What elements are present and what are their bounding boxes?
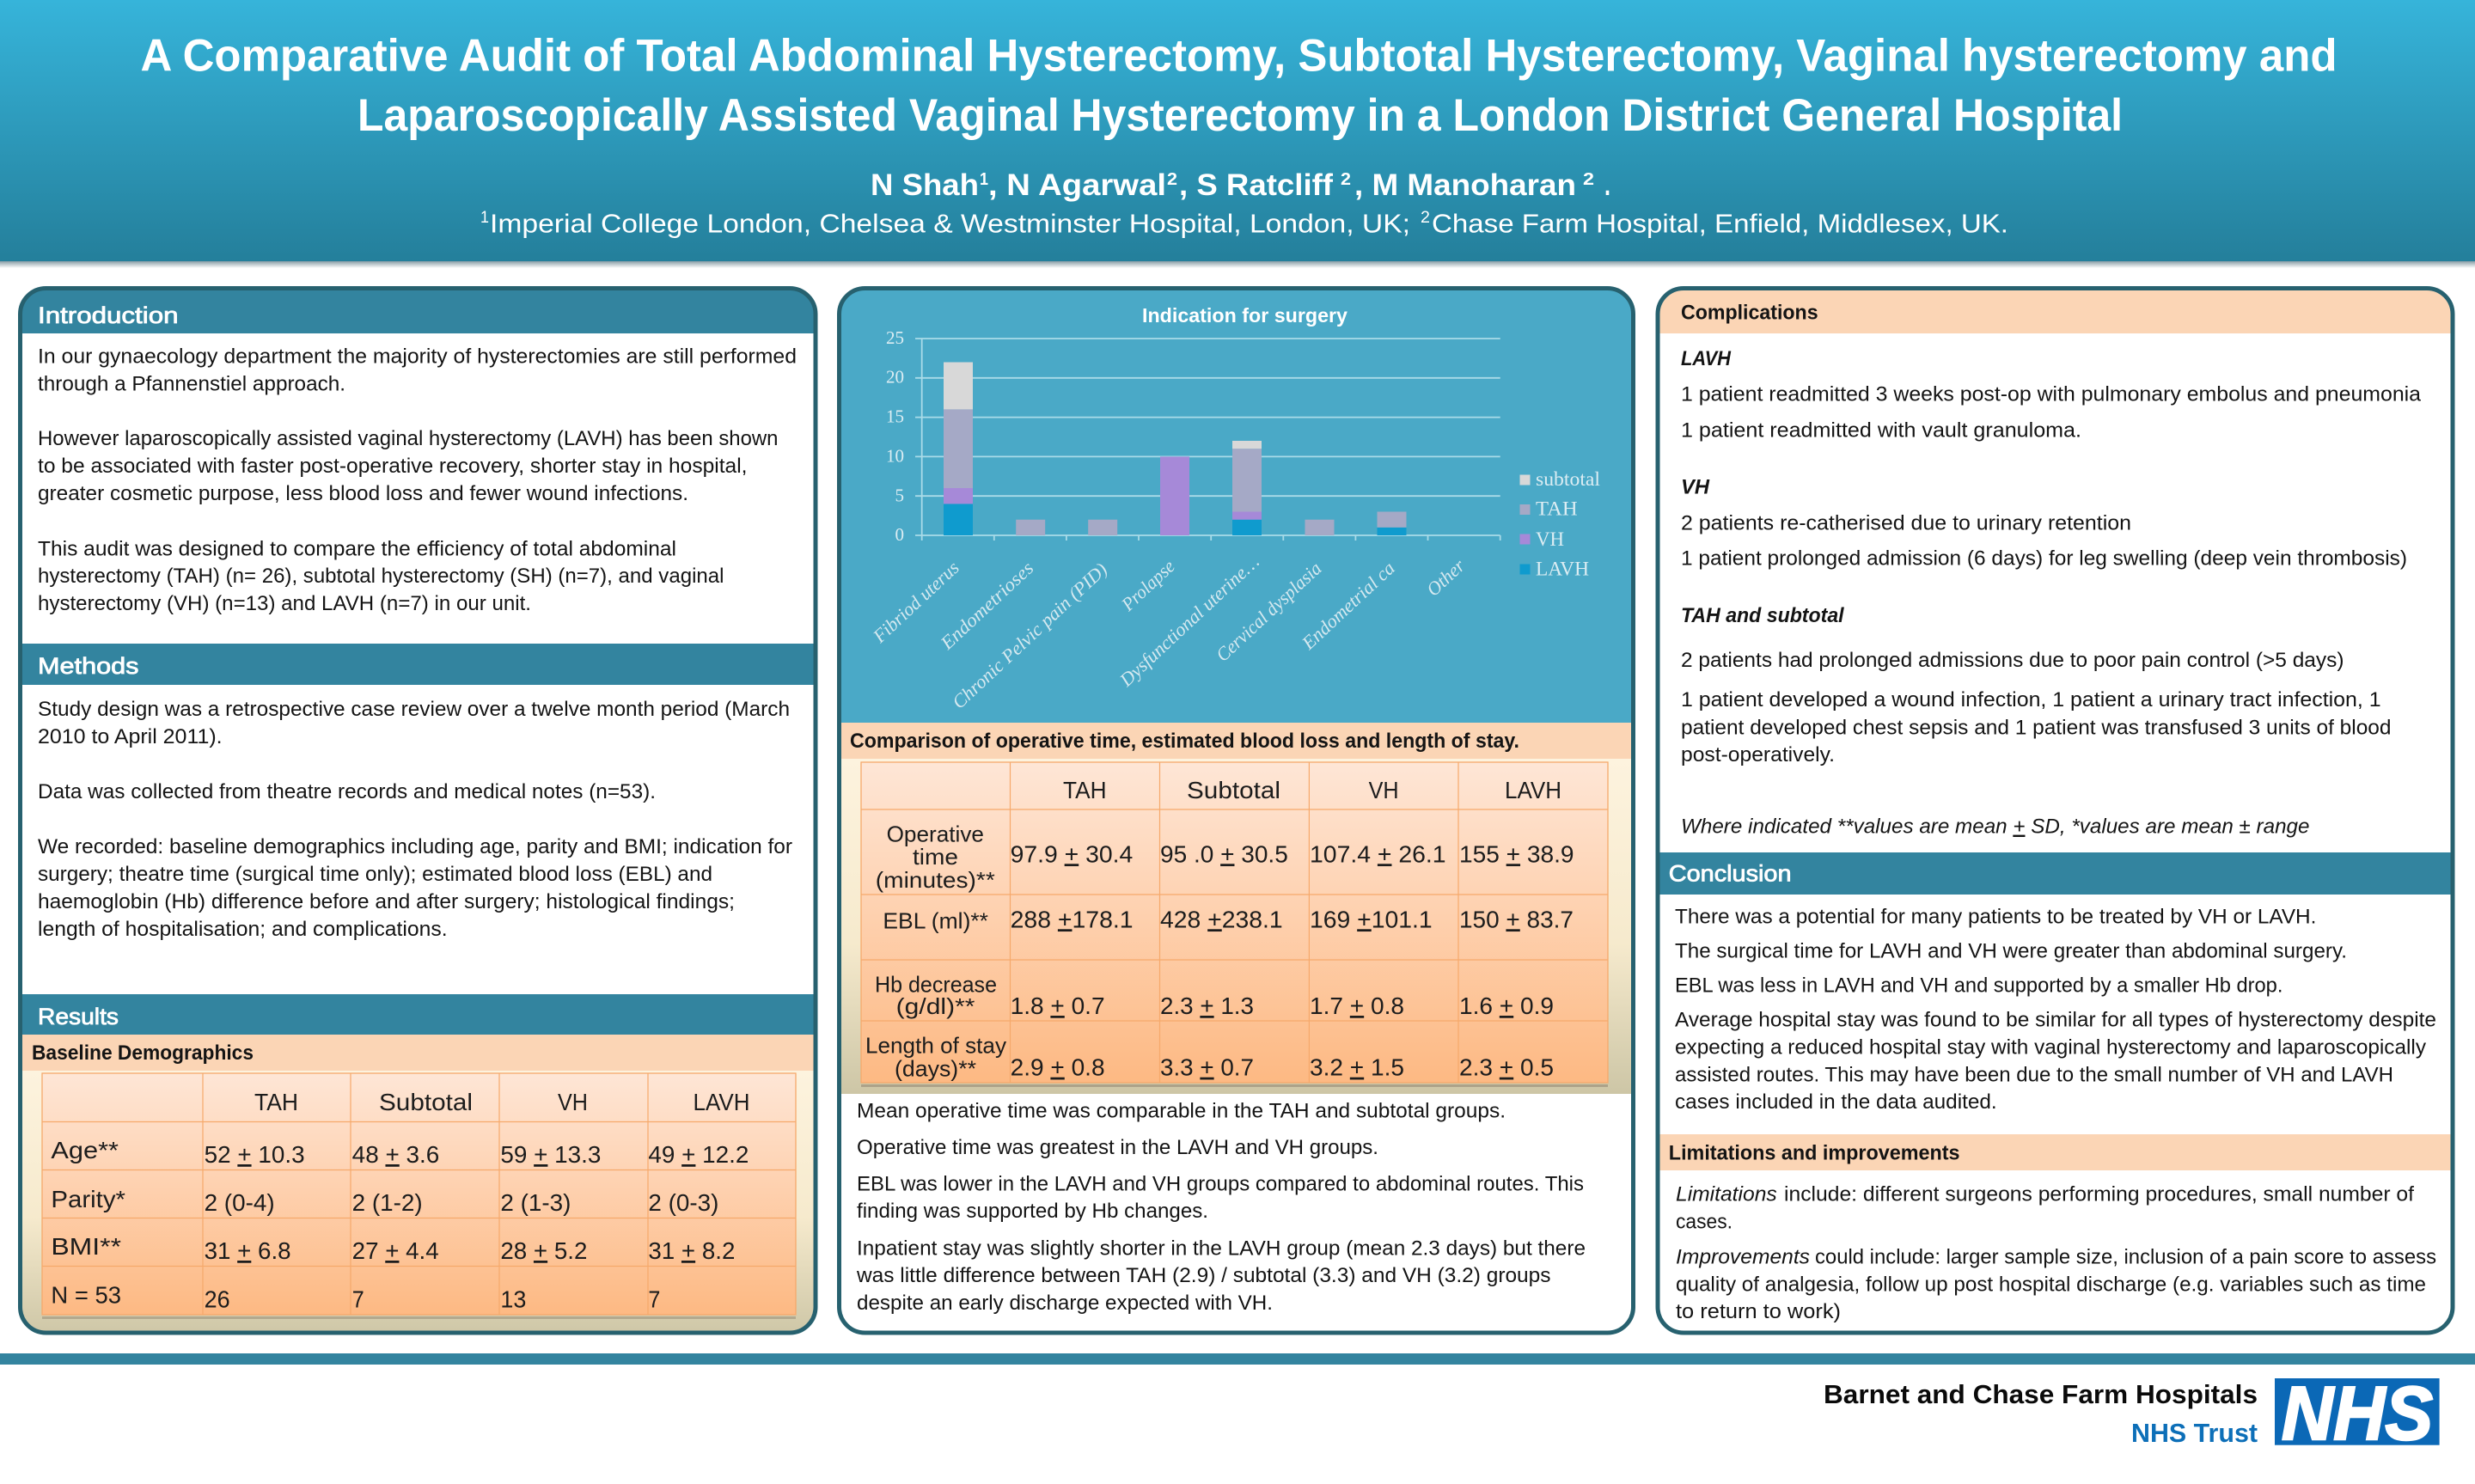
table row: N [51, 1282, 660, 1313]
table header row: LAVH [1505, 777, 1561, 803]
text: complications: 2 patients had prolonged admissions due to poor pain control (>5 days) [1681, 649, 2344, 672]
category labels: Endometrioses [936, 557, 1037, 654]
table row: parity: Parity* [51, 1186, 125, 1212]
legend: LAVH [1536, 559, 1589, 579]
text: complications: LAVH [1681, 347, 1732, 370]
text: methods: length of hospitalisation; and complications. [38, 918, 448, 941]
table row: BMI: BMI** [51, 1233, 121, 1260]
table row: length of stay: 2.9 + 0.8 [1011, 1054, 1105, 1081]
text: results commentary: finding was supported by Hb changes. [857, 1200, 1208, 1223]
text: conclusion: Average hospital stay was found to be similar for all types of hysterectomy despite [1675, 1008, 2436, 1031]
category labels: Endometrial ca [1297, 557, 1399, 654]
text: results commentary: Mean operative time was comparable in the TAH and subtotal groups. [857, 1100, 1506, 1123]
table header row: TAH [254, 1089, 298, 1115]
text: results commentary: despite an early discharge expected with VH. [857, 1292, 1273, 1315]
table row: N: 26 [205, 1286, 230, 1313]
table header row: VH [558, 1089, 588, 1115]
y axis labels: 10 [886, 446, 904, 467]
y axis labels: 0 [895, 524, 904, 545]
table row: operative time [876, 821, 1574, 893]
text: complications: 1 patient readmitted 3 weeks post-op with pulmonary embolus and pneumonia [1681, 382, 2422, 406]
text: limitations and improvements: could include: larger sample size, inclusion of a pain score to assess [1815, 1246, 2436, 1269]
text: introduction: greater cosmetic purpose, less blood loss and fewer wound infections. [38, 482, 688, 505]
table row: length of stay: Length of stay [865, 1033, 1006, 1059]
table row: EBL: 150 + 83.7 [1459, 906, 1574, 932]
category labels [868, 551, 1470, 713]
category labels: Other [1422, 554, 1470, 601]
text: methods: We recorded: baseline demographics including age, parity and BMI; indication for [38, 835, 792, 858]
text: introduction: However laparoscopically assisted vaginal hysterectomy (LAVH) has been shown [38, 427, 779, 450]
y axis labels [886, 327, 904, 545]
y axis labels: 20 [886, 367, 904, 388]
text: limitations and improvements: Improvements [1676, 1246, 1810, 1269]
table row: age: 48 + 3.6 [352, 1141, 439, 1168]
authors [871, 168, 1610, 202]
text: limitations and improvements: quality of analgesia, follow up post hospital discharge (e.g. variables such as time [1676, 1273, 2426, 1297]
table row: age [51, 1137, 749, 1168]
table row: operative time: 97.9 + 30.4 [1011, 840, 1133, 867]
table header row: TAH [1063, 777, 1107, 803]
table row: N: 7 [352, 1286, 364, 1313]
chart: indication for surgery [868, 304, 1600, 713]
table row: Hb decrease: 1.8 + 0.7 [1011, 992, 1105, 1019]
authors: , M Manoharan [1354, 168, 1576, 202]
text: results commentary [856, 1100, 1586, 1315]
text: complications: 1 patient readmitted with vault granuloma. [1681, 418, 2081, 442]
heading: results: Results [38, 1004, 119, 1029]
panel: middle column [834, 286, 1637, 1333]
text: introduction: through a Pfannenstiel approach. [38, 373, 345, 396]
text: conclusion: There was a potential for many patients to be treated by VH or LAVH. [1675, 905, 2316, 928]
text: introduction: hysterectomy (TAH) (n= 26), subtotal hysterectomy (SH) (n=7), and vaginal [38, 565, 724, 588]
text: conclusion [1675, 905, 2436, 1114]
text: conclusion: cases included in the data audited. [1675, 1090, 1997, 1114]
table header row: Subtotal [379, 1089, 473, 1115]
table row: length of stay: (days)** [895, 1056, 976, 1082]
text: introduction [38, 345, 797, 615]
text: methods: 2010 to April 2011). [38, 725, 223, 748]
category labels: Fibriod uterus [868, 557, 963, 647]
chart title: Indication for surgery [1142, 304, 1348, 327]
table row: Hb decrease: 1.6 + 0.9 [1459, 992, 1554, 1019]
footer: trust name: NHS Trust [2131, 1418, 2258, 1448]
table: operative comparison [861, 762, 1608, 1087]
text: complications: 1 patient prolonged admission (6 days) for leg swelling (deep vein thrombosis) [1681, 547, 2407, 571]
table row: Hb decrease: (g/dl)** [896, 993, 975, 1019]
table row: operative time: (minutes)** [876, 867, 995, 893]
authors: N Shah [871, 168, 979, 202]
authors: 2 [1583, 170, 1594, 189]
heading: methods: Methods [38, 653, 139, 679]
text: introduction: This audit was designed to compare the efficiency of total abdominal [38, 538, 676, 561]
table header row: VH [1369, 777, 1399, 803]
affiliations: Chase Farm Hospital, Enfield, Middlesex, UK. [1432, 209, 2008, 239]
table row: age: 52 + 10.3 [205, 1141, 305, 1168]
text: limitations and improvements [1676, 1182, 2436, 1323]
title: Laparoscopically Assisted Vaginal Hysterectomy in a London District General Hospital [358, 90, 2123, 141]
text: methods [38, 698, 792, 941]
table row: N: 13 [500, 1286, 526, 1313]
table row: age: 59 + 13.3 [500, 1141, 601, 1168]
text: methods: haemoglobin (Hb) difference before and after surgery; histological findings; [38, 890, 735, 913]
table row: age: 49 + 12.2 [648, 1141, 749, 1168]
table row: parity: 2 (0-3) [648, 1189, 718, 1216]
table row: BMI: 31 + 6.8 [205, 1237, 291, 1264]
title [141, 31, 2338, 141]
subheading: limitations and improvements: Limitations and improvements [1669, 1141, 1959, 1164]
text: introduction: In our gynaecology department the majority of hysterectomies are still performed [38, 345, 797, 369]
authors: , S Ratcliff [1179, 168, 1333, 202]
footer: trust name [1824, 1379, 2258, 1448]
text: methods: Study design was a retrospective case review over a twelve month period (March [38, 698, 790, 721]
subheading: baseline demographics: Baseline Demographics [32, 1041, 254, 1065]
table row: EBL [883, 906, 1574, 934]
y axis labels: 15 [886, 406, 904, 426]
table header row [1063, 777, 1561, 803]
table row: Hb decrease: 2.3 + 1.3 [1160, 992, 1254, 1019]
category labels: Cervical dysplasia [1212, 558, 1325, 666]
table row: operative time: Operative [887, 821, 984, 846]
affiliations: Imperial College London, Chelsea & Westminster Hospital, London, UK; [490, 209, 1410, 239]
table row: length of stay [865, 1033, 1554, 1082]
table row: EBL: 169 +101.1 [1310, 906, 1433, 932]
text: results commentary: Operative time was greatest in the LAVH and VH groups. [857, 1136, 1378, 1159]
authors: . [1604, 168, 1610, 202]
text: introduction: to be associated with faster post-operative recovery, shorter stay in hospital, [38, 455, 748, 478]
header banner [0, 0, 2475, 268]
text: limitations and improvements: include: different surgeons performing procedures, small number of [1784, 1182, 2414, 1206]
legend: VH [1536, 528, 1564, 550]
table row: Hb decrease: 1.7 + 0.8 [1310, 992, 1404, 1019]
text: complications: post-operatively. [1681, 743, 1835, 766]
text: complications: 2 patients re-catherised due to urinary retention [1681, 511, 2131, 534]
footer bar [0, 1353, 2475, 1365]
table row: length of stay: 2.3 + 0.5 [1459, 1054, 1554, 1081]
text: conclusion: assisted routes. This may have been due to the small number of VH and LAVH [1675, 1063, 2393, 1086]
text: methods: surgery; theatre time (surgical time only); estimated blood loss (EBL) and [38, 863, 712, 886]
title: A Comparative Audit of Total Abdominal Hysterectomy, Subtotal Hysterectomy, Vaginal hysterectomy and [141, 31, 2338, 81]
table row: EBL: 288 +178.1 [1011, 906, 1134, 932]
authors: , N Agarwal [988, 168, 1166, 202]
panel: right column [1654, 286, 2458, 1333]
table row: operative time: 95 .0 + 30.5 [1160, 840, 1288, 867]
stacked bars [944, 363, 1406, 535]
text: limitations and improvements: Limitations [1676, 1182, 1777, 1206]
y axis labels: 5 [895, 485, 904, 505]
table row: operative time: time [913, 844, 958, 870]
text: introduction: hysterectomy (VH) (n=13) and LAVH (n=7) in our unit. [38, 592, 531, 615]
table row: EBL: 428 +238.1 [1160, 906, 1283, 932]
table row: Hb decrease [875, 971, 1554, 1019]
subheading: complications: Complications [1681, 301, 1818, 324]
footer: trust name: Barnet and Chase Farm Hospitals [1824, 1379, 2258, 1409]
text: results commentary: EBL was lower in the LAVH and VH groups compared to abdominal routes. This [857, 1173, 1584, 1196]
table row: age: Age** [51, 1137, 119, 1163]
text: results commentary: was little difference between TAH (2.9) / subtotal (3.3) and VH (3.2) groups [856, 1264, 1550, 1287]
legend [1519, 468, 1600, 579]
table row: N: N = 53 [51, 1282, 121, 1308]
icon: NHS logo: NHS [2282, 1371, 2433, 1456]
table: baseline demographics [42, 1073, 796, 1319]
table row: length of stay: 3.2 + 1.5 [1310, 1054, 1404, 1081]
table row: parity: 2 (0-4) [205, 1189, 275, 1216]
text: methods: Data was collected from theatre records and medical notes (n=53). [38, 780, 656, 803]
table row: BMI: 27 + 4.4 [352, 1237, 439, 1264]
table row: parity: 2 (1-2) [352, 1189, 423, 1216]
text: complications [1681, 347, 2422, 766]
subheading: comparison: Comparison of operative time, estimated blood loss and length of stay. [850, 730, 1519, 753]
text: results commentary: Inpatient stay was slightly shorter in the LAVH group (mean 2.3 days) but there [857, 1237, 1586, 1261]
category labels: Prolapse [1116, 555, 1179, 615]
text: complications: 1 patient developed a wound infection, 1 patient a urinary tract infection, 1 [1681, 688, 2381, 711]
table row: operative time: 107.4 + 26.1 [1310, 840, 1446, 867]
table row: parity [51, 1186, 718, 1216]
text: limitations and improvements: to return to work) [1676, 1300, 1841, 1323]
table header row [254, 1089, 749, 1115]
footnote: Where indicated **values are mean + SD, *values are mean ± range [1681, 815, 2310, 839]
table row: BMI: 28 + 5.2 [500, 1237, 587, 1264]
text: limitations and improvements: cases. [1676, 1210, 1732, 1233]
legend: TAH [1536, 498, 1578, 520]
table row: N: 7 [648, 1286, 660, 1313]
text: conclusion: EBL was less in LAVH and VH and supported by a smaller Hb drop. [1675, 974, 2282, 997]
table row: BMI [51, 1233, 735, 1264]
table row: EBL: EBL (ml)** [883, 908, 988, 934]
table header row: LAVH [693, 1089, 749, 1115]
table row: Hb decrease: Hb decrease [875, 971, 997, 997]
authors: 2 [1167, 170, 1177, 189]
authors: 2 [1341, 170, 1351, 189]
table row: parity: 2 (1-3) [500, 1189, 571, 1216]
affiliations: 1 [480, 209, 489, 227]
affiliations: 2 [1421, 209, 1430, 227]
legend: subtotal [1536, 468, 1600, 490]
text: complications: VH [1681, 476, 1710, 498]
category labels: Dysfunctional uterine… [1115, 551, 1263, 691]
text: complications: TAH and subtotal [1681, 604, 1845, 627]
table row: length of stay: 3.3 + 0.7 [1160, 1054, 1254, 1081]
category labels: Chronic Pelvic pain (PID) [948, 559, 1111, 713]
table row: BMI: 31 + 8.2 [648, 1237, 735, 1264]
panel: left column [17, 286, 821, 1337]
text: conclusion: The surgical time for LAVH and VH were greater than abdominal surgery. [1675, 939, 2347, 962]
text: complications: patient developed chest sepsis and 1 patient was transfused 3 units of blood [1681, 716, 2391, 739]
affiliations [480, 209, 2008, 239]
text: conclusion: expecting a reduced hospital stay with vaginal hysterectomy and laparoscopically [1675, 1035, 2426, 1059]
authors: 1 [980, 170, 988, 189]
table header row: Subtotal [1187, 777, 1280, 803]
heading: conclusion: Conclusion [1669, 861, 1791, 887]
heading: introduction: Introduction [38, 302, 179, 328]
y axis labels: 25 [886, 327, 904, 348]
table row: operative time: 155 + 38.9 [1459, 840, 1574, 867]
